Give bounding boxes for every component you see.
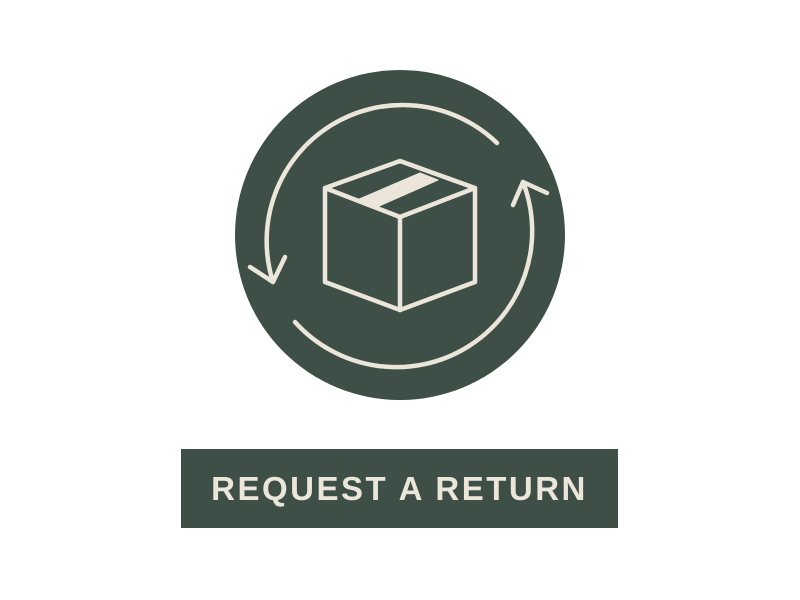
- button: request a return: [181, 449, 618, 528]
- arrow: lower arc: [295, 182, 547, 367]
- button: request a return: REQUEST A RETURN: [211, 470, 588, 507]
- box: [325, 161, 475, 310]
- arrow: upper arc: [250, 105, 497, 282]
